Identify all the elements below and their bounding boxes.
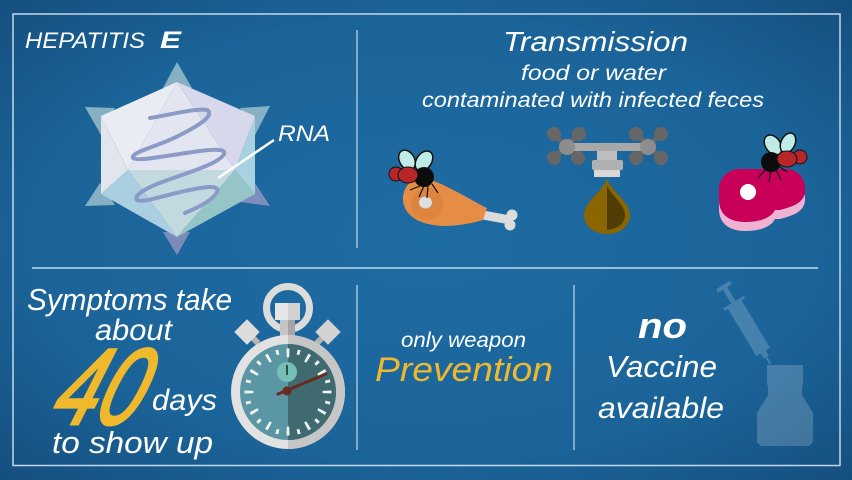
virus diagram xyxy=(85,62,270,255)
days text xyxy=(52,384,217,460)
prevention text: only weapon xyxy=(401,329,526,352)
symptoms text: Symptoms take xyxy=(27,282,232,317)
no vaccine text: Vaccine xyxy=(606,349,717,384)
transmission heading xyxy=(422,26,765,112)
icon: chicken leg with fly xyxy=(389,147,518,230)
symptoms text xyxy=(27,282,232,447)
no vaccine text xyxy=(598,305,724,425)
heading: hepatitis E: E xyxy=(160,27,182,54)
icon: meat with fly xyxy=(719,131,807,231)
days text: days xyxy=(152,384,217,417)
icon: syringe and vial xyxy=(713,279,813,446)
heading: hepatitis E xyxy=(25,27,182,54)
RNA label xyxy=(218,121,330,178)
RNA strand xyxy=(133,110,224,213)
transmission heading: contaminated with infected feces xyxy=(422,89,765,112)
no vaccine text: available xyxy=(598,392,724,425)
prevention text: Prevention xyxy=(375,351,553,389)
heading: hepatitis E: HEPATITIS xyxy=(25,28,145,53)
days text: to show up xyxy=(52,425,213,460)
transmission heading: Transmission xyxy=(503,26,688,57)
prevention text xyxy=(375,329,553,389)
transmission heading: food or water xyxy=(521,62,667,85)
symptoms text: about xyxy=(95,314,174,347)
big number 40: 40 xyxy=(40,326,172,447)
icon: dirty water drop xyxy=(584,179,630,234)
icon: stopwatch xyxy=(231,286,345,449)
RNA label: RNA xyxy=(278,121,330,146)
no vaccine text: no xyxy=(638,305,687,346)
icon: contaminated tap xyxy=(547,127,668,234)
